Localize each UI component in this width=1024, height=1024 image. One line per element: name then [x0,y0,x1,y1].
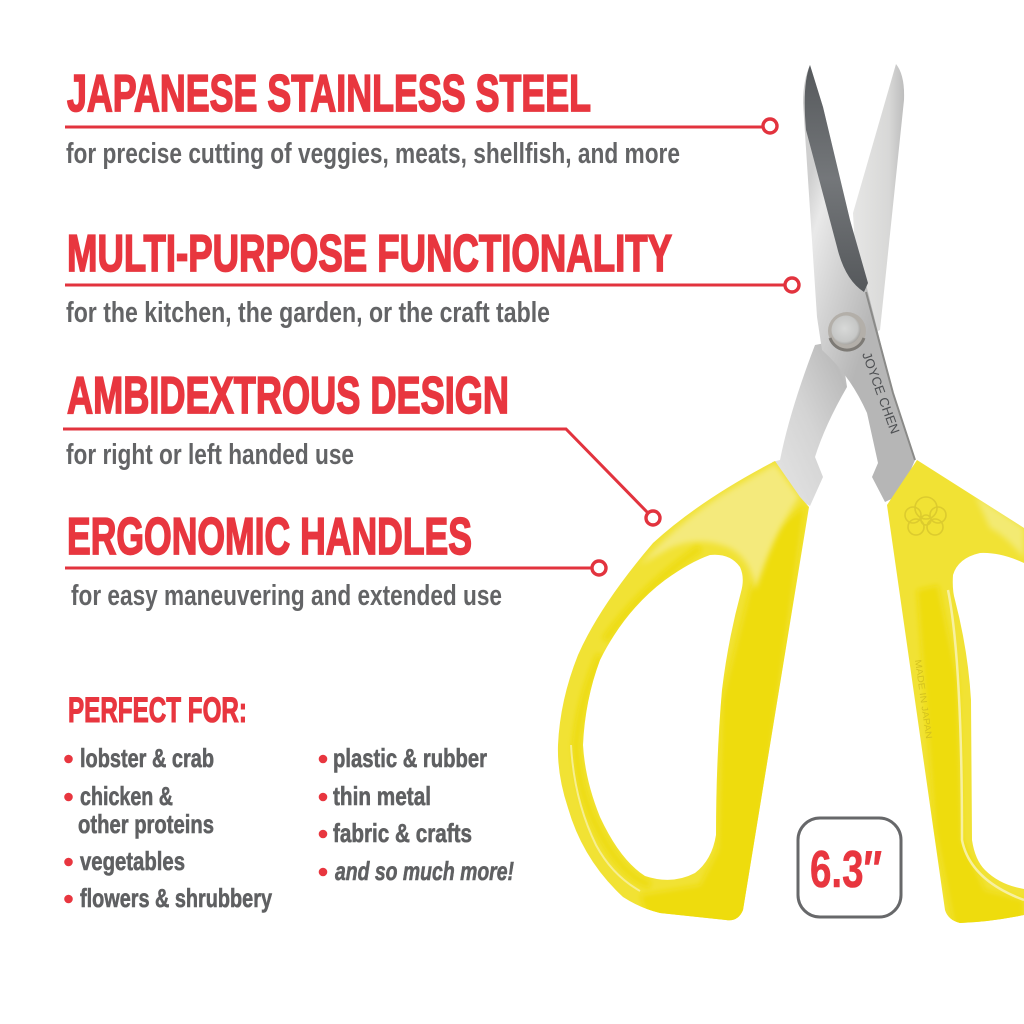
description: for precise cutting of veggies, meats, shellfish, and more [66,138,680,170]
engraved brand: JOYCE CHEN [859,350,903,436]
callout: ergonomic handles [65,508,606,612]
heading: MULTI-PURPOSE FUNCTIONALITY [67,225,672,283]
size value: 6.3″ [810,841,882,899]
leader line [63,429,660,525]
list: left column: chicken & [80,781,173,811]
left tang [772,340,847,506]
right handle [887,460,1024,930]
heading: JAPANESE STAINLESS STEEL [67,65,591,123]
embossed text: MADE IN JAPAN [913,659,934,739]
description: for right or left handed use [66,439,354,471]
infographic canvas [63,64,1024,923]
callout: multi-purpose functionality [65,225,799,329]
list: left column [64,743,272,913]
leader line [65,561,606,575]
flower emblem [905,497,946,535]
heading: ERGONOMIC HANDLES [67,508,472,566]
callout: ambidextrous design [63,367,660,525]
front blade and right tang [803,65,915,502]
list: right column: thin metal [333,781,431,811]
scissors [558,64,1024,930]
description: for easy maneuvering and extended use [71,580,502,612]
callout: Japanese stainless steel [65,65,777,170]
back blade [853,64,904,340]
list: right column: fabric & crafts [333,818,472,848]
handle highlight [640,464,799,590]
dark bar of the handle [917,585,1024,930]
left handle [558,461,809,930]
leader line [65,119,777,133]
dark bar of the handle [640,505,805,930]
pivot screw [828,312,866,350]
handle highlight [975,495,1024,558]
list: right column: and so much more! [335,856,514,886]
list: right column [319,743,514,886]
description: for the kitchen, the garden, or the craft table [66,297,550,329]
list: left column: lobster & crab [80,743,214,773]
rim highlight [571,745,640,891]
size badge [798,818,901,917]
dark blade bevel [805,65,868,292]
list: right column: plastic & rubber [333,743,487,773]
list: left column: vegetables [80,846,185,876]
rim highlight [948,590,1024,900]
list: left column: flowers & shrubbery [80,883,272,913]
inner rim shading [576,655,650,885]
panel: perfect for [64,691,514,913]
leader line [65,278,799,292]
heading: AMBIDEXTROUS DESIGN [67,367,509,425]
subheading: PERFECT FOR: [68,691,247,730]
list: left column: other proteins [78,809,214,839]
